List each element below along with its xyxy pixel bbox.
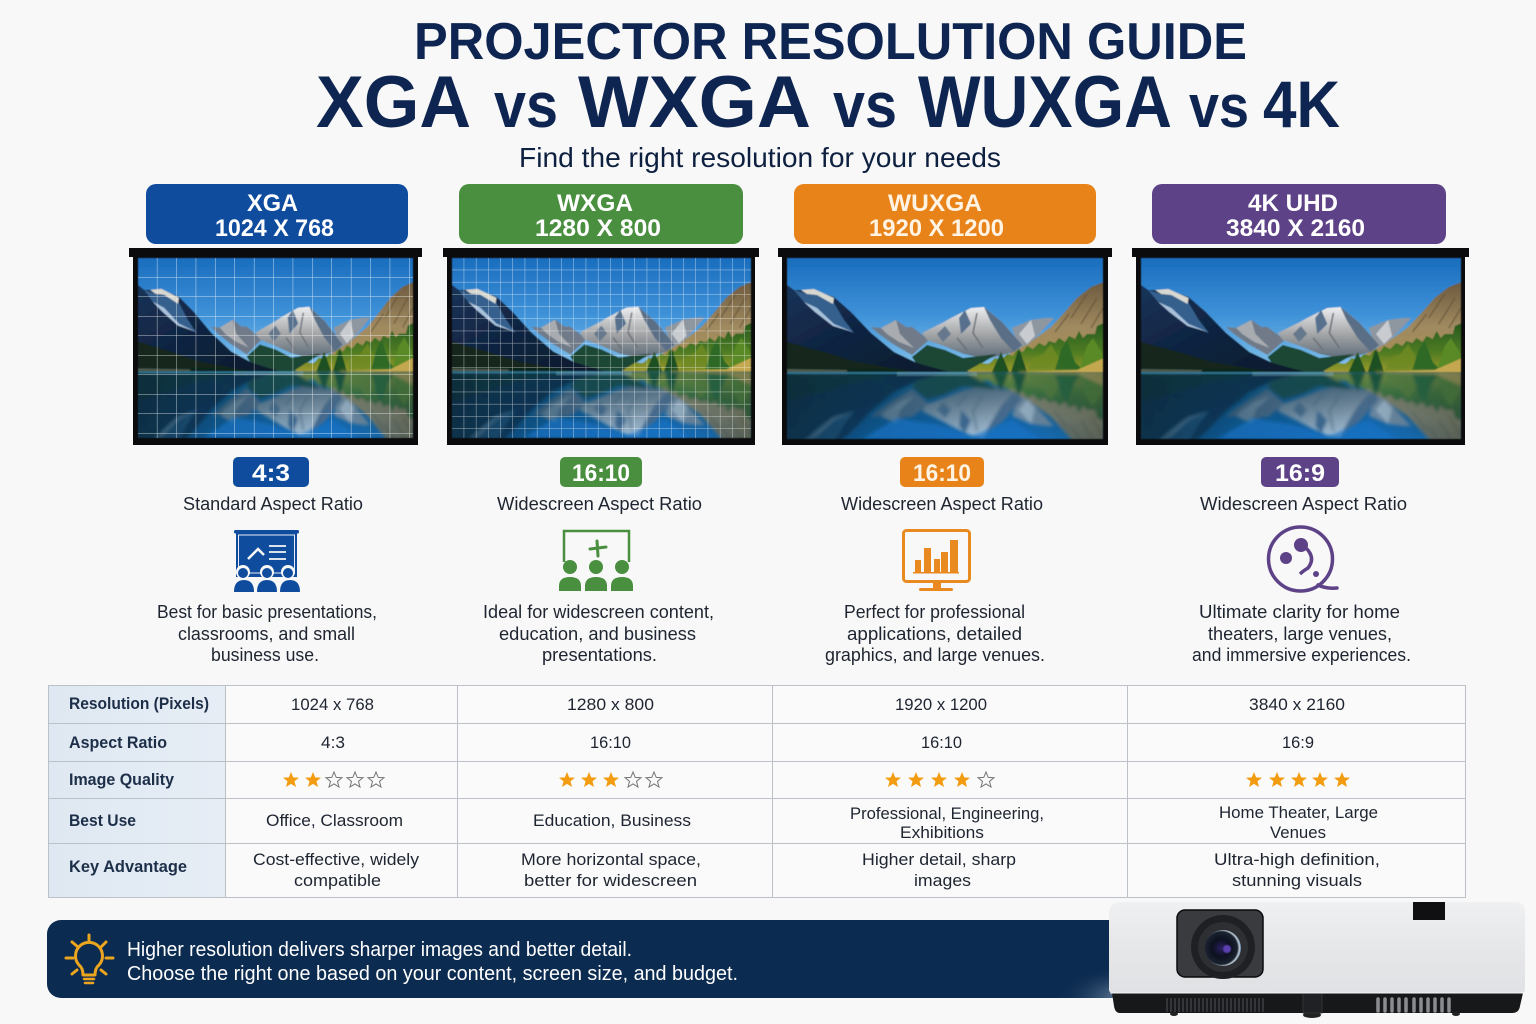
row: aspect ratio: 16:9: [1282, 733, 1314, 752]
description: XGA: Best for basic presentations,: [157, 602, 377, 622]
aspect ratio badge: 16:10: [900, 457, 984, 487]
aspect ratio caption: Standard Aspect Ratio: [183, 494, 363, 514]
header: 4K UHD: 3840 X 2160: [1226, 215, 1365, 242]
description: 4K UHD: [1192, 602, 1411, 665]
header: WXGA: WXGA: [557, 190, 633, 217]
title: WUXGA: [918, 62, 1172, 143]
description: XGA: [157, 602, 377, 665]
row: key advantage: Cost-effective, widely: [253, 850, 420, 869]
aspect ratio badge: 16:9: 16:9: [1275, 460, 1325, 487]
row: resolution: [69, 694, 1345, 714]
row: image quality with stars: Image Quality: [69, 770, 175, 789]
description: WUXGA: applications, detailed: [847, 624, 1022, 644]
screen: XGA landscape with coarse pixel grid: [129, 248, 422, 461]
aspect ratio badge: 4:3: 4:3: [252, 460, 290, 487]
aspect ratio badge: 16:10: [560, 457, 642, 487]
title: vs: [1189, 73, 1249, 140]
title: WXGA: [578, 62, 811, 143]
lens: [1177, 910, 1263, 979]
aspect ratio badge: 16:10: 16:10: [572, 460, 630, 487]
row: best use: [69, 803, 1378, 842]
title: vs: [494, 69, 558, 141]
description: WXGA: presentations.: [542, 645, 657, 665]
stars: XGA 2 of 5: [283, 772, 384, 787]
icon: light bulb: [66, 935, 113, 983]
row: key advantage: Key Advantage: [69, 857, 187, 876]
aspect ratio caption: Widescreen Aspect Ratio: [1200, 494, 1407, 514]
header: 4K UHD: 4K UHD: [1248, 190, 1338, 217]
stars: 4K 5 of 5: [1246, 772, 1350, 787]
banner text: [127, 939, 738, 985]
description: 4K UHD: Ultimate clarity for home: [1199, 602, 1400, 622]
row: resolution: 1280 x 800: [567, 695, 654, 714]
row: key advantage: More horizontal space,: [521, 850, 701, 869]
row: best use: Office, Classroom: [266, 811, 403, 830]
row: key advantage: Ultra-high definition,: [1214, 850, 1380, 869]
panel: 4K UHD: [1132, 184, 1469, 665]
title: XGA: [316, 62, 471, 143]
row: best use: Home Theater, Large: [1219, 803, 1378, 822]
aspect ratio badge: 4:3: [233, 457, 309, 487]
description: XGA: classrooms, and small: [178, 624, 355, 644]
row: aspect ratio: [69, 733, 1314, 752]
description: WXGA: [483, 602, 714, 665]
panel: WXGA: [443, 184, 759, 665]
header: XGA: 1024 X 768: [215, 215, 334, 242]
aspect ratio caption: Widescreen Aspect Ratio: [497, 494, 702, 514]
row: best use: Exhibitions: [900, 823, 984, 842]
banner text: Higher resolution delivers sharper images and better detail.: [127, 939, 632, 961]
header: WUXGA: WUXGA: [888, 190, 982, 217]
panel: WUXGA: [778, 184, 1112, 665]
screen: WUXGA landscape: [778, 248, 1112, 462]
icon: monitor with bar chart: [904, 530, 970, 591]
icon: classroom presentation: [234, 530, 300, 592]
row: key advantage: compatible: [294, 871, 381, 890]
description: WUXGA: Perfect for professional: [844, 602, 1025, 622]
description: WXGA: education, and business: [499, 624, 696, 644]
header: 4K UHD: [1152, 184, 1446, 244]
row: key advantage: better for widescreen: [524, 871, 697, 890]
subtitle: Find the right resolution for your needs: [519, 142, 1001, 173]
header: XGA: XGA: [247, 190, 298, 217]
callout banner: [47, 920, 1137, 998]
aspect ratio badge: 16:9: [1261, 457, 1339, 487]
icon: widescreen audience: [559, 531, 633, 591]
row: best use: Best Use: [69, 811, 136, 830]
row: key advantage: Higher detail, sharp: [862, 850, 1016, 869]
row: aspect ratio: 4:3: [321, 733, 345, 752]
row: aspect ratio: 16:10: [590, 733, 631, 752]
screen: WXGA landscape with medium pixel grid: [443, 248, 759, 461]
comparison table: [48, 686, 1466, 898]
row: image quality with stars: [69, 770, 1350, 789]
description: 4K UHD: theaters, large venues,: [1208, 624, 1392, 644]
row: aspect ratio: Aspect Ratio: [69, 733, 167, 752]
row: resolution: 1024 x 768: [291, 695, 374, 714]
aspect ratio caption: Widescreen Aspect Ratio: [841, 494, 1043, 514]
sensor window: [1413, 902, 1445, 920]
row: resolution: 1920 x 1200: [895, 695, 987, 714]
panel: XGA: [129, 184, 422, 665]
stars: WUXGA 4 of 5: [885, 772, 994, 787]
row: aspect ratio: 16:10: [921, 733, 962, 752]
screen: 4K landscape: [1132, 248, 1469, 462]
header: XGA: [146, 184, 408, 244]
description: XGA: business use.: [211, 645, 319, 665]
icon: magnified clarity circle: [1268, 527, 1337, 591]
description: 4K UHD: and immersive experiences.: [1192, 645, 1411, 665]
row: resolution: Resolution (Pixels): [69, 694, 209, 713]
vents: [1167, 994, 1449, 1013]
row: resolution: 3840 x 2160: [1249, 695, 1345, 714]
header: WXGA: 1280 X 800: [535, 215, 661, 242]
header: WXGA: [459, 184, 743, 244]
title: [316, 13, 1340, 143]
stars: WXGA 3 of 5: [559, 772, 662, 787]
projector: [1109, 902, 1525, 1018]
title: PROJECTOR RESOLUTION GUIDE: [414, 13, 1247, 71]
description: WUXGA: [825, 602, 1045, 665]
title: vs: [833, 69, 897, 141]
row: key advantage: images: [914, 871, 971, 890]
title: 4K: [1263, 67, 1340, 141]
row: key advantage: [69, 850, 1380, 890]
header: WUXGA: [794, 184, 1096, 244]
header: WUXGA: 1920 X 1200: [869, 215, 1004, 242]
row: key advantage: stunning visuals: [1232, 871, 1362, 890]
description: WUXGA: graphics, and large venues.: [825, 645, 1045, 665]
aspect ratio badge: 16:10: 16:10: [913, 460, 971, 487]
row: best use: Venues: [1270, 823, 1326, 842]
row: best use: Education, Business: [533, 811, 691, 830]
row: best use: Professional, Engineering,: [850, 804, 1044, 823]
banner text: Choose the right one based on your content, screen size, and budget.: [127, 963, 738, 985]
description: WXGA: Ideal for widescreen content,: [483, 602, 714, 622]
